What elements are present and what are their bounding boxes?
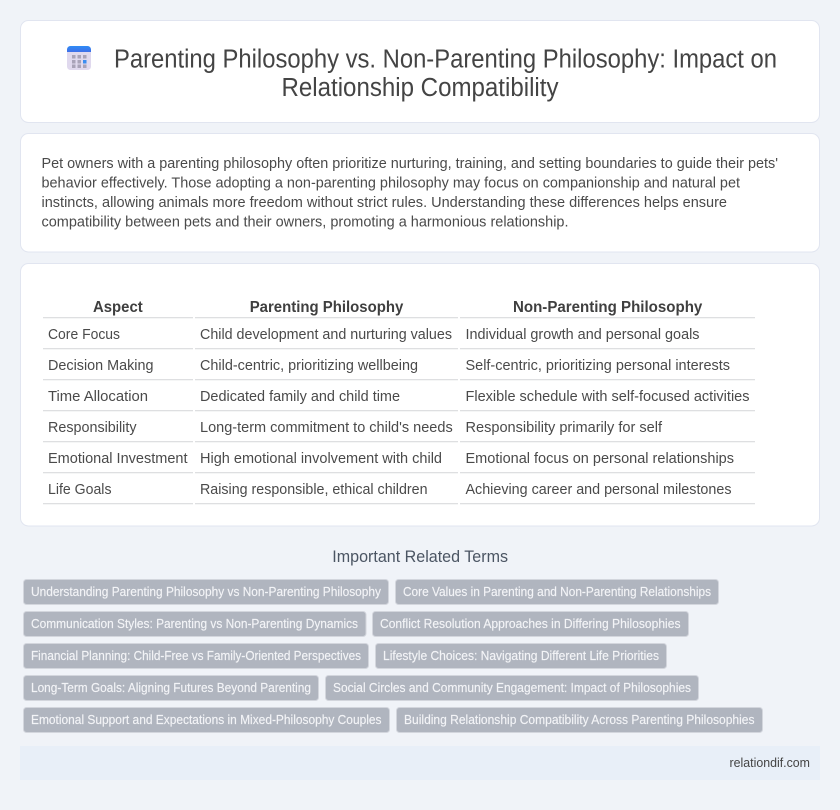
footer: relationdif.com: [730, 755, 810, 770]
tag: Financial Planning: Child-Free vs Family-Oriented Perspectives: [31, 649, 361, 663]
row: time allocation: Time Allocation: [48, 388, 148, 405]
tag: [24, 708, 390, 732]
intro paragraph: instincts, allowing animals more freedom without strict rules. Understanding these differences helps ensure: [42, 194, 727, 211]
row: life goals: Raising responsible, ethical children: [200, 481, 428, 498]
row: emotional investment: Emotional Investment: [48, 450, 188, 467]
table header: Aspect: [93, 299, 143, 316]
tag: [326, 676, 698, 700]
tag: Understanding Parenting Philosophy vs Non-Parenting Philosophy: [31, 585, 382, 599]
panel: comparison table: [20, 264, 820, 526]
tag: [396, 580, 718, 604]
row: responsibility: Responsibility primarily for self: [466, 419, 663, 436]
tag: [372, 612, 688, 636]
row: core focus: Core Focus: [48, 326, 120, 343]
tag: [24, 644, 368, 668]
tag: Emotional Support and Expectations in Mixed-Philosophy Couples: [31, 713, 382, 727]
table header: [93, 299, 703, 316]
table header: Non-Parenting Philosophy: [513, 299, 703, 316]
tag: Conflict Resolution Approaches in Differing Philosophies: [380, 617, 680, 631]
row: decision making: Child-centric, prioritizing wellbeing: [200, 357, 418, 374]
table header: Parenting Philosophy: [250, 299, 404, 316]
intro paragraph: Pet owners with a parenting philosophy often prioritize nurturing, training, and setting boundaries to guide their pets': [42, 155, 778, 172]
row: responsibility: [48, 419, 663, 436]
tag: [24, 676, 318, 700]
heading: related terms: Important Related Terms: [332, 548, 508, 566]
row: life goals: Achieving career and personal milestones: [466, 481, 732, 498]
title: Parenting Philosophy vs. Non-Parenting Philosophy: Impact on: [114, 46, 777, 74]
tag: Social Circles and Community Engagement: Impact of Philosophies: [333, 681, 691, 695]
tag: [396, 708, 762, 732]
row: life goals: [48, 481, 732, 498]
intro paragraph: behavior effectively. Those adopting a non-parenting philosophy may focus on companionship and natural pet: [42, 174, 741, 192]
tag: [24, 580, 388, 604]
intro paragraph: compatibility between pets and their owners, promoting a harmonious relationship.: [42, 214, 568, 230]
row: core focus: [48, 326, 700, 343]
title: Relationship Compatibility: [282, 74, 559, 102]
row: decision making: Self-centric, prioritizing personal interests: [466, 357, 730, 374]
row: time allocation: [48, 388, 750, 405]
tag: Lifestyle Choices: Navigating Different Life Priorities: [383, 649, 659, 663]
intro paragraph: [42, 155, 778, 230]
row: life goals: Life Goals: [48, 481, 112, 498]
tag: Core Values in Parenting and Non-Parenting Relationships: [403, 585, 711, 599]
row: emotional investment: [48, 450, 734, 467]
title: [114, 46, 777, 102]
row: emotional investment: Emotional focus on personal relationships: [466, 450, 734, 467]
row: emotional investment: High emotional involvement with child: [200, 450, 442, 467]
row: time allocation: Flexible schedule with self-focused activities: [466, 388, 750, 405]
row: decision making: [48, 357, 730, 374]
row: responsibility: Responsibility: [48, 419, 137, 436]
panel: intro text: [20, 134, 820, 252]
row: time allocation: Dedicated family and child time: [200, 388, 400, 405]
footer: [20, 746, 820, 780]
panel: related term tags: [24, 580, 762, 732]
tag: Long-Term Goals: Aligning Futures Beyond Parenting: [31, 681, 311, 695]
tag: Building Relationship Compatibility Across Parenting Philosophies: [404, 713, 754, 727]
panel: header card: [20, 20, 820, 122]
icon: calendar: [67, 46, 91, 70]
row: decision making: Decision Making: [48, 357, 154, 374]
row: responsibility: Long-term commitment to child's needs: [200, 419, 453, 436]
row: core focus: Individual growth and personal goals: [466, 326, 700, 343]
tag: Communication Styles: Parenting vs Non-Parenting Dynamics: [31, 617, 358, 631]
tag: [24, 612, 366, 636]
tag: [376, 644, 666, 668]
row: core focus: Child development and nurturing values: [200, 326, 452, 343]
